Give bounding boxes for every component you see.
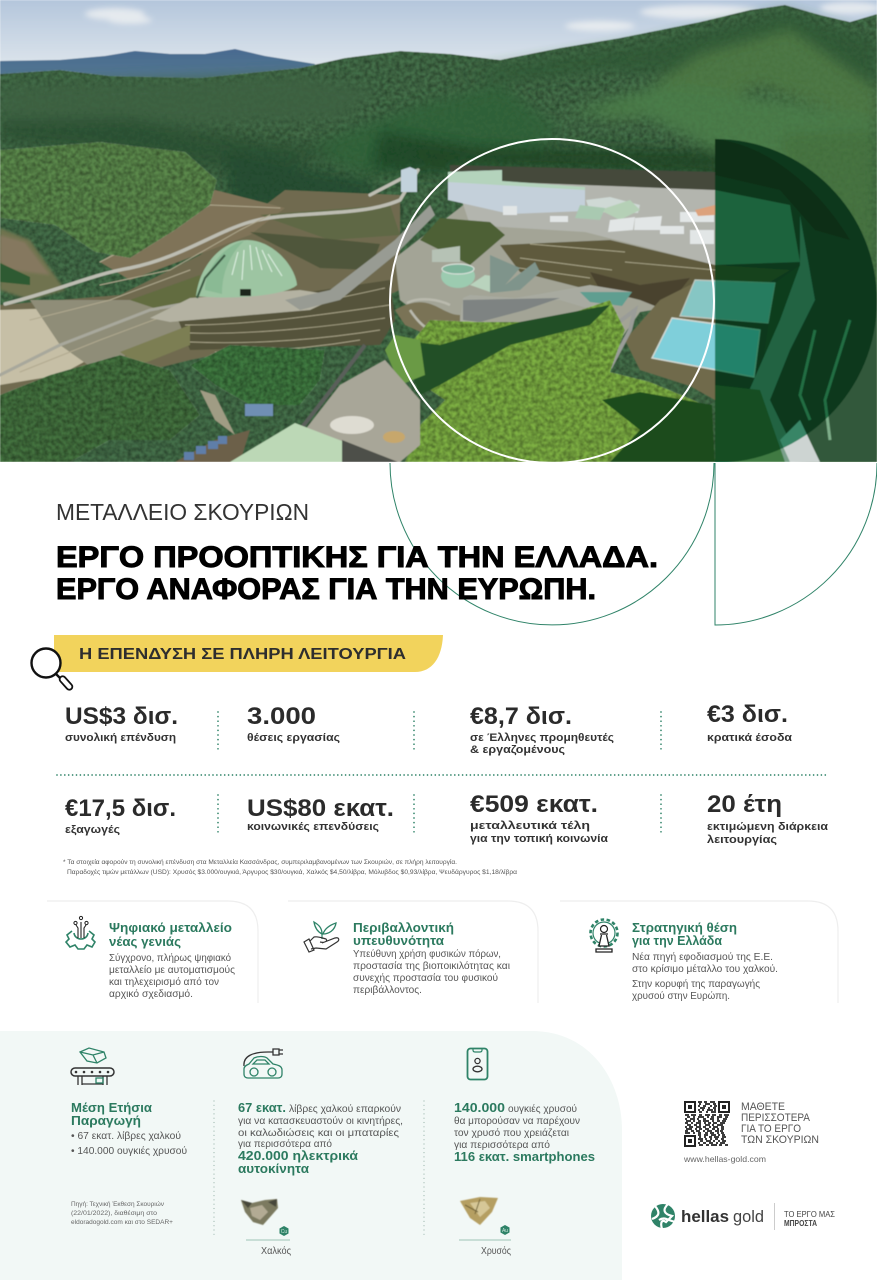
green semicircle outline [390,463,714,625]
copper text: οι καλωδιώσεις και οι μπαταρίες [238,1127,399,1139]
panel: environmental responsibility: προστασία της βιοποικιλότητας και [353,960,510,972]
panel: digital mine: αρχικό σχεδιασμό. [109,988,193,1000]
figure: social investment: κοινωνικές επενδύσεις [247,821,379,833]
thickener tanks [440,271,476,288]
subtitle: ΜΕΤΑΛΛΕΙΟ ΣΚΟΥΡΙΩΝ [56,499,309,525]
learn more text: ΠΕΡΙΣΣΟΤΕΡΑ [741,1112,811,1124]
white circle outline [390,139,714,463]
figure: social investment: US$80 εκατ. [247,795,394,822]
green quarter circle outline [715,463,877,625]
panel: environmental responsibility: περιβάλλοντος. [353,984,422,996]
source note: Πηγή: Τεχνική Έκθεση Σκουριών [71,1200,164,1208]
footnote [63,859,518,876]
main mill buildings [448,170,585,214]
terraces [120,280,395,365]
landscape right of the plant [715,139,877,462]
copper text: 67 εκατ. [238,1100,286,1115]
panel: environmental responsibility [288,901,538,1003]
figure: mining fees: για την τοπική κοινωνία [470,833,608,845]
copper text [238,1100,403,1176]
distant blue mountains [0,48,316,79]
key figures [65,701,828,846]
figure: social investment [247,795,394,833]
icon: magnifier [32,648,74,691]
figure: state revenue: €3 δισ. [707,701,788,728]
forest patches [0,142,715,462]
panel: annual production [0,1031,622,1280]
panel: strategic position: στο κρίσιμο μέταλλο του χαλκού. [632,963,778,975]
source note: eldoradogold.com και στο SEDAR+ [71,1219,173,1226]
panel: strategic position: Στρατηγική θέση [632,921,737,935]
copper text: για να κατασκευαστούν οι κινητήρες, [238,1115,403,1127]
gold ore sample [459,1197,511,1257]
production bullets: • 67 εκατ. λίβρες χαλκού [71,1130,181,1142]
panel: strategic position: χρυσού στην Ευρώπη. [632,990,730,1002]
learn more text: ΜΑΘΕΤΕ [741,1101,785,1113]
panel: environmental responsibility: υπευθυνότητα [353,934,444,948]
icon: smartphone [468,1048,488,1080]
slogan: ΜΠΡΟΣΤΑ [784,1219,817,1228]
figure: total investment [65,703,178,744]
panel: digital mine: μεταλλείο με αυτοματισμούς [109,964,235,976]
figure: suppliers: & εργαζομένους [470,744,565,756]
icon: digital gear [66,916,95,949]
figure: jobs [247,703,340,744]
panel: strategic position [560,901,838,1003]
gold ore sample: Χρυσός [481,1245,511,1257]
figure: jobs: θέσεις εργασίας [247,732,340,744]
lower works and buildings [175,345,420,462]
logo: hellas gold: hellas [681,1207,729,1226]
learn more text: ΤΩΝ ΣΚΟΥΡΙΩΝ [741,1134,819,1146]
slogan: ΤΟ ΕΡΓΟ ΜΑΣ [784,1210,835,1219]
panel: digital mine: νέας γενιάς [109,935,181,949]
icon: logo mark [651,1204,676,1229]
sky [0,0,877,66]
figure: lifetime: 20 έτη [707,791,782,818]
production bullets: • 140.000 ουγκιές χρυσού [71,1145,187,1157]
left slope and bare ground [0,190,400,400]
panel: strategic position: Στην κορυφή της παραγωγής [632,978,760,990]
production heading: Μέση Ετήσια [71,1100,152,1115]
footnote: * Τα στοιχεία αφορούν τη συνολική επένδυση στα Μεταλλεία Κασσάνδρας, συμπεριλαμβανομένων των Σκουριών, σε πλήρη λειτουργία. [63,859,457,866]
panel: digital mine: Ψηφιακό μεταλλείο [109,921,232,935]
QR code [685,1102,729,1146]
yellow banner: Η ΕΠΕΝΔΥΣΗ ΣΕ ΠΛΗΡΗ ΛΕΙΤΟΥΡΓΙΑ [79,646,406,663]
icon: hand with seedling [304,922,339,952]
gold text: 140.000 [454,1100,505,1115]
main title [56,541,658,606]
figure: total investment: US$3 δισ. [65,703,178,730]
small pond [580,292,632,306]
icon: electric car [244,1049,283,1078]
figure: lifetime: λειτουργίας [707,834,777,846]
main title: ΕΡΓΟ ΑΝΑΦΟΡΑΣ ΓΙΑ ΤΗΝ ΕΥΡΩΠΗ. [56,573,596,606]
panel: strategic position: Νέα πηγή εφοδιασμού της Ε.Ε. [632,951,773,963]
figure: state revenue [707,701,792,744]
gold text: τον χρυσό που χρειάζεται [454,1127,570,1139]
dark green half circle overlay [715,139,877,463]
dome storage building [150,240,340,322]
production heading: Παραγωγή [71,1113,141,1128]
aerial photo of the mine site [0,0,877,463]
learn more text [741,1101,819,1146]
gold text: 116 εκατ. smartphones [454,1149,595,1164]
footnote: Παραδοχές τιμών μετάλλων (USD): Χρυσός $3.000/ουγκιά, Άργυρος $30/ουγκιά, Χαλκός $4,50/λίβρα, Μόλυβδος $0,93/λίβρα, Ψευδάργυρος $1,18/λίβρα [67,869,518,876]
figure: exports: εξαγωγές [65,824,120,836]
panel: environmental responsibility: Υπεύθυνη χρήση φυσικών πόρων, [353,948,501,960]
panel: strategic position: για την Ελλάδα [632,934,722,948]
logo: hellas gold: gold [733,1207,764,1226]
panel: digital mine: Σύγχρονο, πλήρως ψηφιακό [109,952,231,964]
panel: environmental responsibility: συνεχής προστασία του φυσικού [353,972,498,984]
access roads [0,170,418,375]
gold text: για περισσότερα από [454,1139,550,1151]
panel: environmental responsibility: Περιβαλλοντική [353,921,454,935]
production bullets [71,1130,187,1157]
copper text: 420.000 ηλεκτρικά [238,1148,358,1163]
copper text: λίβρες χαλκού επαρκούν [289,1103,401,1115]
tailing ponds [652,280,775,377]
copper ore sample: Χαλκός [261,1245,291,1257]
logo: hellas gold [651,1204,764,1229]
figure: mining fees [470,791,608,845]
figure: mining fees: €509 εκατ. [470,791,598,818]
figure: lifetime: εκτιμώμενη διάρκεια [707,821,828,833]
main title: ΕΡΓΟ ΠΡΟΟΠΤΙΚΗΣ ΓΙΑ ΤΗΝ ΕΛΛΑΔΑ. [56,541,658,574]
learn more text: ΓΙΑ ΤΟ ΕΡΓΟ [741,1123,801,1135]
gold text: ουγκιές χρυσού [508,1103,577,1115]
figure: jobs: 3.000 [247,703,316,730]
source note: (22/01/2022), διαθέσιμη στο [71,1209,157,1217]
icon: conveyor with ore [71,1048,114,1085]
copper text: αυτοκίνητα [238,1161,309,1176]
gold text: θα μπορούσαν να παρέχουν [454,1115,580,1127]
figure: state revenue: κρατικά έσοδα [707,732,792,744]
figure: mining fees: μεταλλευτικά τέλη [470,820,590,832]
panel: digital mine [47,901,258,1003]
yellow banner [54,635,443,672]
website: www.hellas-gold.com [683,1154,766,1164]
figure: exports: €17,5 δισ. [65,795,176,822]
copper ore sample: Cu [281,1229,287,1235]
icon: gear and chess pawn [590,920,618,952]
figure: suppliers: €8,7 δισ. [470,703,572,730]
slogan [784,1210,835,1228]
gold text [454,1100,595,1164]
figure: suppliers [470,703,614,756]
gold ore sample: Au [502,1228,508,1234]
figure: exports [65,795,176,836]
production heading [71,1100,152,1128]
copper text: για περισσότερα από [238,1138,332,1150]
figure: lifetime [707,791,828,846]
source note [71,1200,173,1226]
silo [401,167,417,192]
copper ore sample [241,1199,291,1257]
figure: suppliers: σε Έλληνες προμηθευτές [470,732,614,744]
process plant and conveyors [285,165,715,400]
forested hills [0,5,877,462]
panel: digital mine: και τηλεχειρισμό από τον [109,976,219,988]
figure: total investment: συνολική επένδυση [65,732,176,744]
